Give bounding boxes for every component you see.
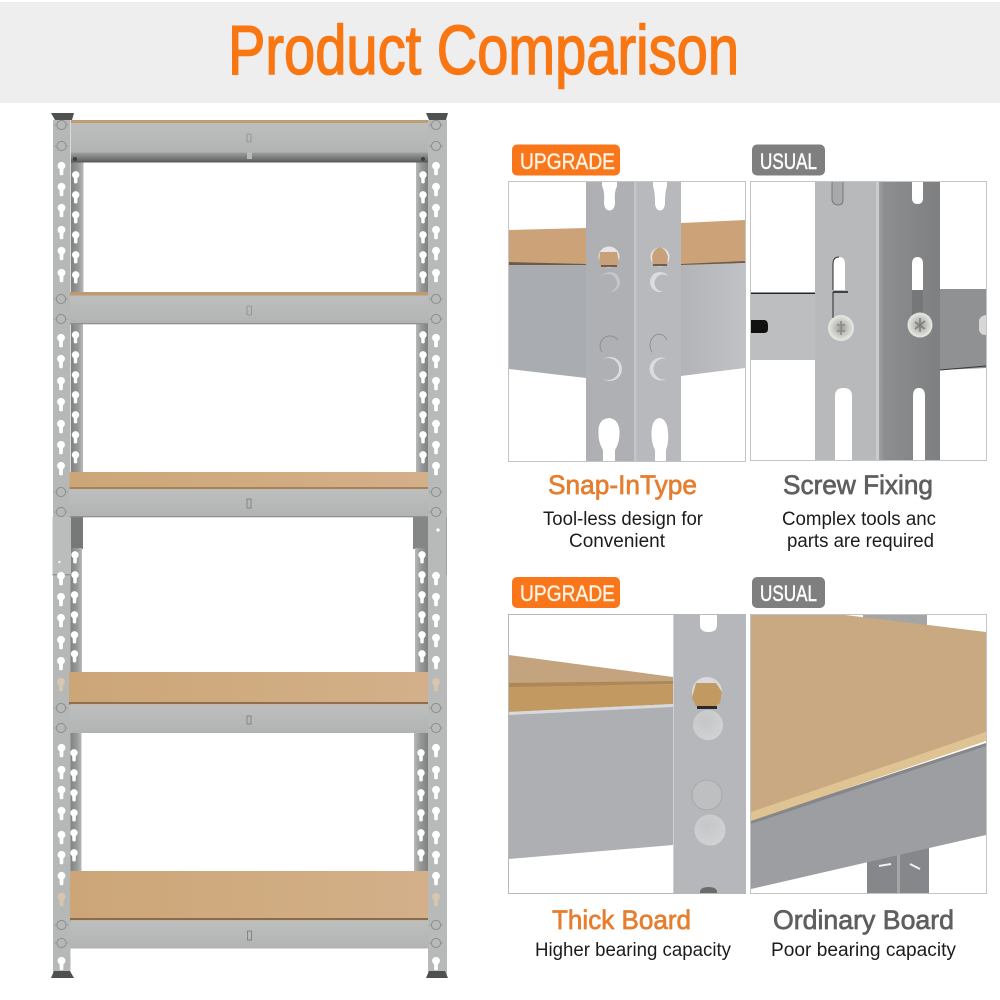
panel: ordinary board detail: [750, 614, 986, 894]
board edge: [751, 732, 986, 821]
caption: ordinary board: [771, 905, 956, 961]
upright: [815, 182, 878, 460]
steel beam: [509, 704, 673, 859]
caption: thick board: [535, 905, 731, 961]
panel: screw fixing detail: [750, 182, 986, 460]
upright: [673, 615, 745, 893]
caption: snap-in type: Snap-InType: [548, 470, 697, 500]
shelf 1 (top): [71, 120, 428, 162]
caption: thick board: Thick Board: [552, 905, 691, 935]
front left upright: [52, 120, 71, 975]
panel: thick board detail: [508, 614, 746, 894]
caption: thick board: Higher bearing capacity: [535, 940, 731, 961]
rivet pins: [600, 272, 620, 292]
beams: [751, 293, 815, 360]
board top: [751, 615, 986, 812]
steel beam: [751, 743, 986, 889]
caption: ordinary board: Poor bearing capacity: [771, 940, 956, 961]
shelf 4: [69, 672, 428, 733]
pins: [693, 710, 723, 740]
hole with board: [692, 677, 722, 697]
upgrade badge, row 2: UPGRADE: [520, 581, 615, 606]
title: Product Comparison: [228, 11, 739, 89]
caption: screw fixing: Screw Fixing: [783, 470, 933, 500]
panel: snap-in type detail: [508, 182, 746, 462]
caption: screw fixing: [782, 470, 936, 552]
caption: ordinary board: Ordinary Board: [773, 905, 954, 935]
shelf connector rivets: [54, 120, 443, 948]
board top: [509, 655, 673, 685]
slots: [700, 615, 717, 632]
beam slots: [751, 320, 768, 333]
thick board edge: [509, 685, 673, 712]
rear uprights: [70, 152, 428, 872]
slots: [833, 182, 925, 460]
caption: screw fixing: parts are required: [787, 531, 934, 552]
caption: snap-in type: Convenient: [569, 531, 666, 552]
caption: screw fixing: Complex tools anc: [782, 509, 936, 530]
header band: [0, 2, 1000, 103]
screws: [828, 315, 854, 341]
shelf 2: [70, 292, 428, 324]
usual badge, row 1: USUAL: [760, 149, 817, 174]
holes with board: [598, 246, 620, 268]
product photo: five-tier metal shelving unit: [51, 113, 448, 978]
usual badge, row 2: [752, 577, 825, 608]
slots: [598, 182, 668, 461]
caption: snap-in type: Tool-less design for: [543, 509, 704, 530]
usual badge, row 1: [752, 144, 825, 176]
shelf 5 (bottom): [70, 871, 428, 948]
rubber feet and caps: [51, 113, 448, 978]
usual badge, row 2: USUAL: [760, 581, 817, 606]
caption: snap-in type: [543, 470, 704, 552]
front right upright: [428, 120, 447, 975]
shelf 3: [70, 472, 428, 517]
upright: [586, 182, 635, 461]
upgrade badge, row 1: UPGRADE: [520, 149, 615, 174]
steel beam: [509, 265, 586, 378]
rear upright: [863, 615, 927, 625]
wood board: [509, 220, 745, 265]
